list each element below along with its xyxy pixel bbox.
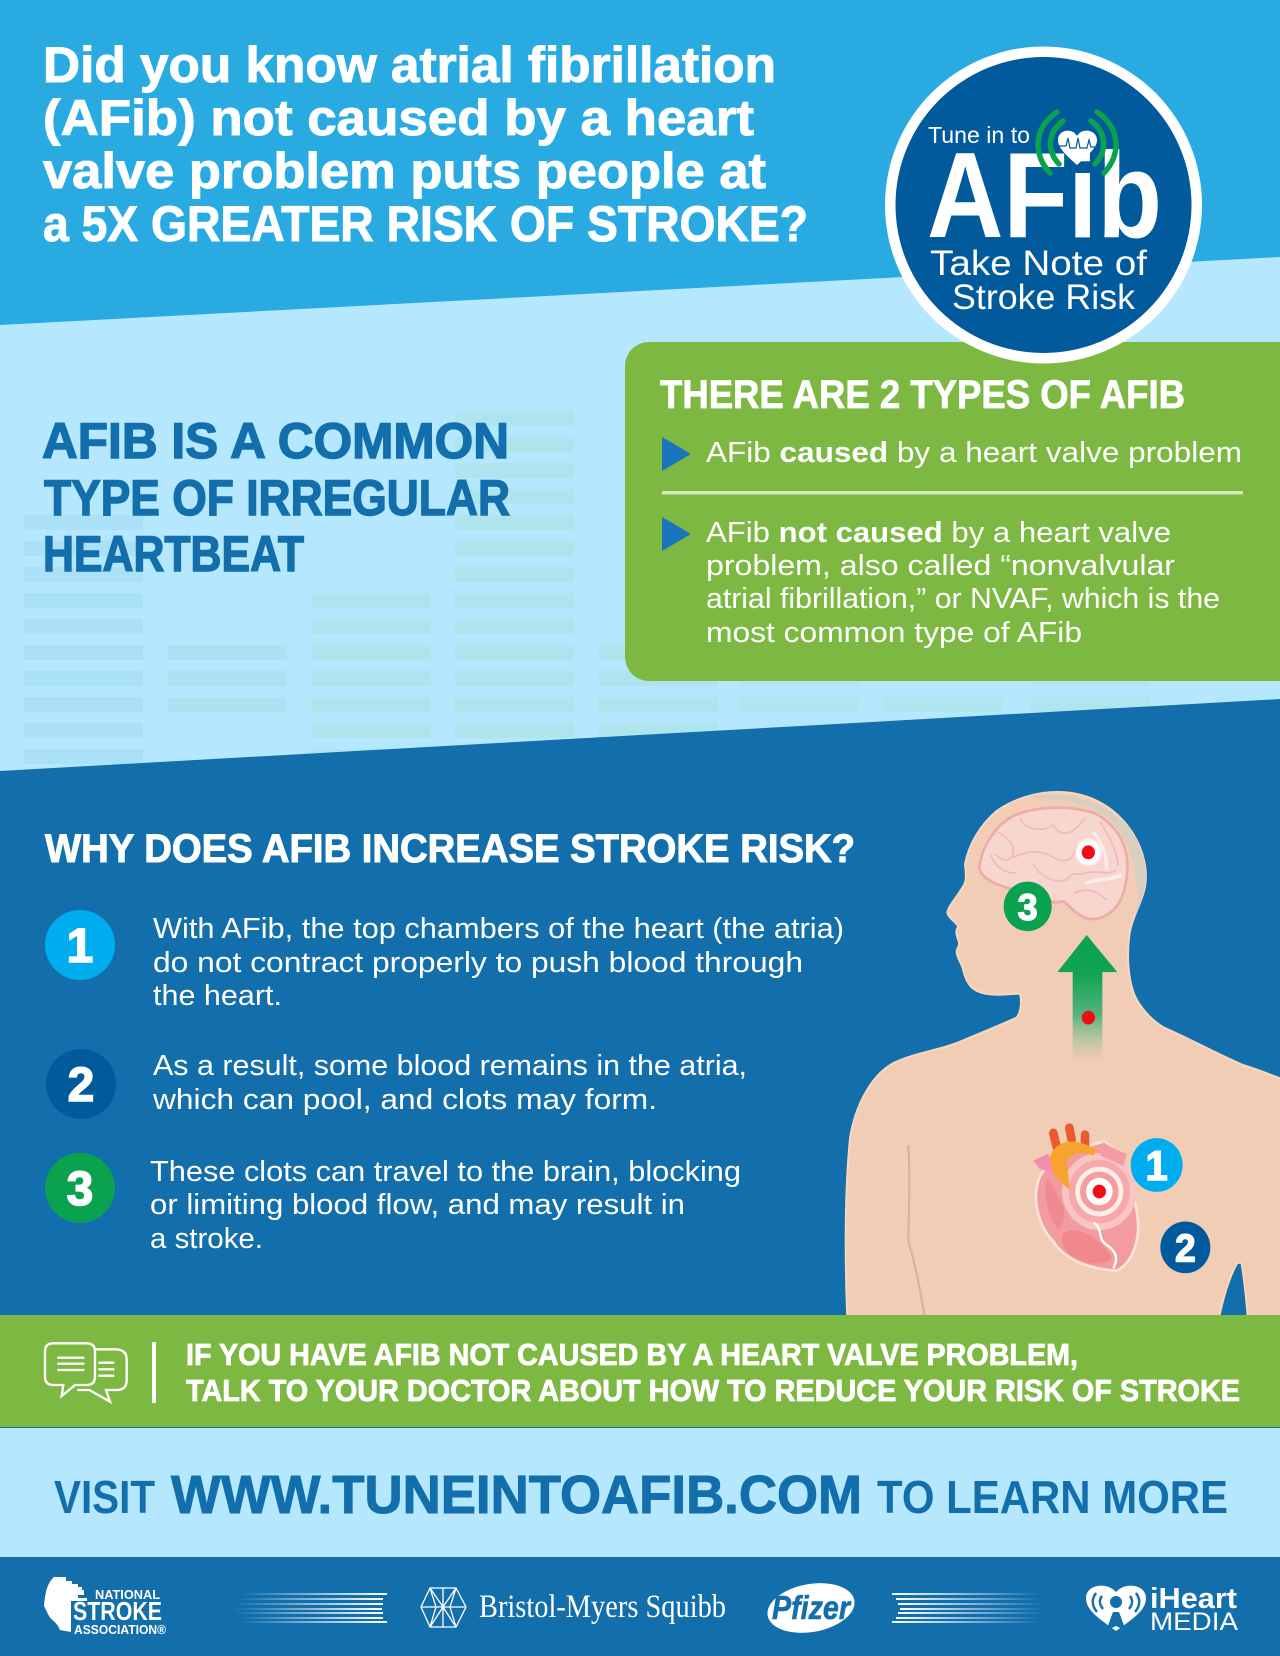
marker 2: 2 [1175, 1228, 1196, 1271]
step 3: 3 [67, 1163, 93, 1216]
panel: 2 types of AFib [625, 342, 1280, 681]
marker 1 [1131, 1138, 1183, 1192]
marker 1: 1 [1146, 1143, 1168, 1189]
heading: AFib is a common type: TYPE OF IRREGULAR [44, 470, 510, 526]
logo: iHeartMedia: iHeart [1150, 1583, 1237, 1615]
step 3: or limiting blood flow, and may result in [150, 1189, 685, 1221]
title [43, 37, 808, 252]
heart illustration [1033, 1128, 1138, 1271]
logo: Bristol-Myers Squibb [421, 1588, 726, 1627]
step 1: the heart. [153, 980, 282, 1012]
icon: heart with signal arcs [1038, 112, 1116, 173]
step 3: a stroke. [150, 1223, 263, 1255]
panel: visit website [0, 1428, 1280, 1557]
body silhouette [846, 792, 1280, 1334]
call to action text [186, 1337, 1240, 1408]
type 2 text: AFib not caused by a heart valve [706, 517, 1171, 549]
red clot in brain [1076, 839, 1101, 865]
decorative lines left [233, 1593, 387, 1623]
panel: footer [0, 1557, 1280, 1656]
logo text: Take Note of Stroke Risk [930, 244, 1147, 317]
step 1: do not contract properly to push blood through [153, 947, 803, 979]
website call to action: VISIT [54, 1471, 155, 1523]
step 2: 2 [68, 1059, 94, 1112]
icon: triangle bullet 1 [662, 437, 691, 471]
type 2 text [706, 517, 1220, 649]
title: valve problem puts people at [43, 143, 766, 199]
step 1: With AFib, the top chambers of the heart (the atria) [153, 913, 844, 945]
website call to action [54, 1465, 1228, 1525]
title: (AFib) not caused by a heart [43, 90, 754, 146]
logo text: AFib: AFib [927, 127, 1162, 263]
step 2: As a result, some blood remains in the atria, [153, 1050, 747, 1082]
logo: National Stroke Association: NATIONAL [95, 1587, 160, 1602]
human figure illustration [846, 792, 1280, 1334]
logo: National Stroke Association: STROKE [73, 1596, 162, 1626]
logo text: Tune in to: Tune in to [928, 122, 1030, 148]
call to action text: IF YOU HAVE AFIB NOT CAUSED BY A HEART VALVE PROBLEM, [186, 1337, 1078, 1372]
logo: Pfizer: Pfizer [772, 1589, 852, 1626]
heading: AFib is a common type: AFIB IS A COMMON [42, 413, 509, 469]
panel: why AFib increases stroke risk [0, 699, 1280, 1320]
step 1 [45, 910, 844, 1012]
step 2: which can pool, and clots may form. [152, 1084, 657, 1116]
logo text: Take Note of Stroke Risk: Take Note of [930, 244, 1147, 283]
title: Did you know atrial fibrillation [43, 37, 776, 93]
marker 2 [1160, 1222, 1210, 1273]
heading: AFib is a common type: HEARTBEAT [43, 526, 304, 582]
type 2 text: problem, also called “nonvalvular [706, 550, 1175, 582]
marker 3: 3 [1018, 886, 1038, 928]
logo: National Stroke Association: ASSOCIATION® [74, 1623, 167, 1637]
AFib logo badge [885, 46, 1202, 364]
brain [979, 808, 1127, 919]
top blue header band [0, 0, 1280, 325]
type 2 text: atrial fibrillation,” or NVAF, which is the [706, 583, 1220, 615]
decorative lines right [892, 1593, 1045, 1623]
marker 3 [1004, 882, 1052, 931]
type 1 text: AFib caused by a heart valve problem [706, 437, 1242, 469]
logo: Pfizer [764, 1577, 858, 1639]
logo: Bristol-Myers Squibb: Bristol-Myers Squibb [479, 1589, 726, 1625]
title: a 5X GREATER RISK OF STROKE? [43, 196, 808, 252]
chest crease [908, 1145, 925, 1317]
website call to action: TO LEARN MORE [877, 1471, 1228, 1523]
logo: iHeartMedia: MEDIA [1150, 1608, 1238, 1636]
panel heading: THERE ARE 2 TYPES OF AFIB [660, 373, 1185, 417]
heading: AFib is a common type [42, 413, 510, 582]
website call to action: WWW.TUNEINTOAFIB.COM [171, 1465, 862, 1525]
type 2 text: most common type of AFib [706, 617, 1082, 649]
panel: green call to action [0, 1315, 1280, 1427]
step 3 [45, 1153, 741, 1255]
step 1: 1 [67, 920, 93, 973]
background equalizer bars [24, 411, 1150, 764]
logo: National Stroke Association [44, 1577, 167, 1637]
arrow up [1057, 935, 1117, 1064]
heading: why does AFib increase stroke risk: WHY DOES AFIB INCREASE STROKE RISK? [45, 827, 855, 871]
step 2 [46, 1049, 747, 1119]
step 3: These clots can travel to the brain, blocking [150, 1156, 741, 1188]
hair shading [1027, 795, 1146, 918]
icon: speech bubbles [45, 1343, 127, 1402]
icon: triangle bullet 2 [662, 517, 691, 551]
logo: iHeartMedia [1086, 1583, 1238, 1636]
panel: light blue background [0, 250, 1280, 790]
logo text: Take Note of Stroke Risk: Stroke Risk [952, 278, 1136, 317]
